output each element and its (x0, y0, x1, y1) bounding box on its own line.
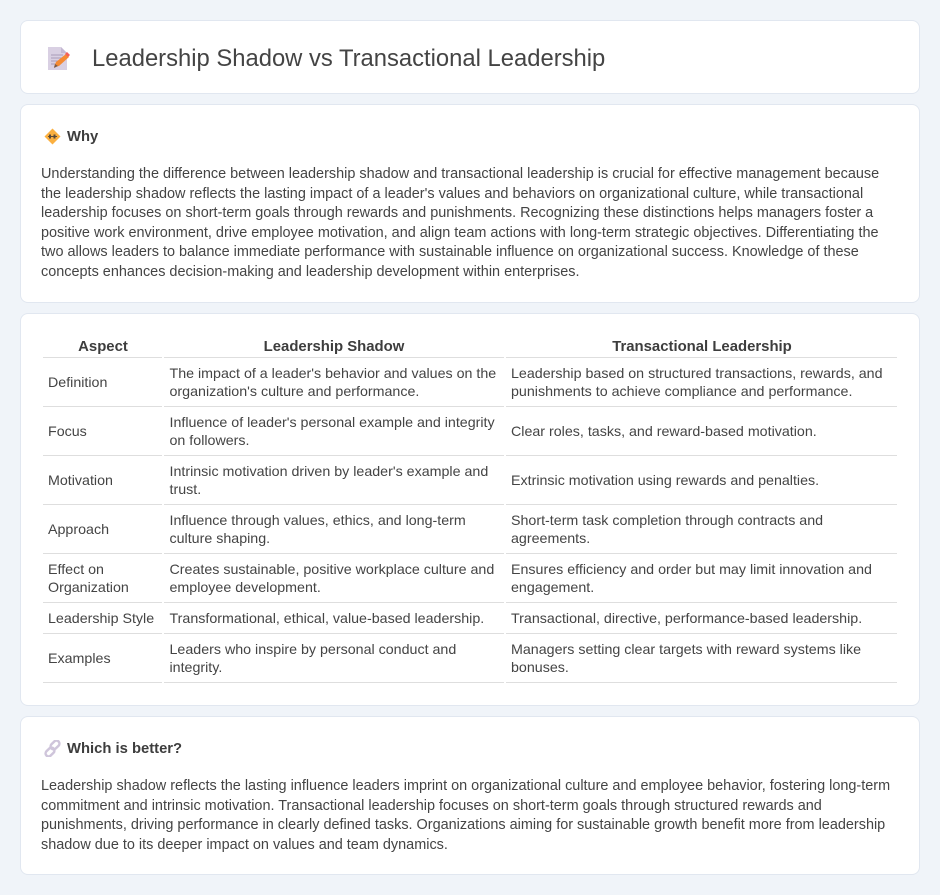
text: Effect on (48, 562, 104, 578)
text: agreements. (511, 531, 590, 547)
text: bonuses. (511, 660, 569, 676)
text: organization's culture and performance. (170, 384, 419, 400)
text: culture shaping. (170, 531, 270, 547)
heading: why: Why (67, 129, 98, 145)
text: two allows leaders to balance immediate performance with sustainable influence on organizational success. Knowledge of these (41, 244, 859, 260)
text: Approach (48, 522, 109, 538)
text: Leadership Shadow (264, 339, 404, 355)
table row: focus (48, 415, 817, 449)
text: The impact of a leader's behavior and values on the (170, 366, 496, 382)
text: positive work environment, drive employee motivation, and align team actions with long-term strategic objectives. Differentiating the (41, 225, 879, 241)
table: header row (78, 339, 792, 355)
panel: which is better (20, 716, 920, 875)
text: Leaders who inspire by personal conduct and (170, 642, 456, 658)
icon: memo with pencil (48, 47, 70, 70)
title: Leadership Shadow vs Transactional Leadership (92, 45, 605, 72)
heading: which is better: Which is better? (67, 741, 182, 757)
table row: motivation (48, 464, 819, 498)
text: Organization (48, 580, 129, 596)
text: Intrinsic motivation driven by leader's example and (170, 464, 488, 480)
table row: effect on organization (48, 562, 872, 596)
text: Leadership based on structured transactions, rewards, and (511, 366, 883, 382)
text: Influence through values, ethics, and long-term (170, 513, 466, 529)
text: integrity. (170, 660, 222, 676)
text: commitment and intrinsic motivation. Transactional leadership focuses on short-term goals through structured rewards and (41, 798, 822, 814)
icon: chain link (44, 740, 61, 757)
panel: comparison table (20, 313, 920, 706)
text block: why paragraph (41, 166, 879, 280)
text: Influence of leader's personal example and integrity (170, 415, 495, 431)
text: Clear roles, tasks, and reward-based motivation. (511, 424, 817, 440)
text: concepts enhances decision-making and leadership development within enterprises. (41, 264, 580, 280)
text: trust. (170, 482, 201, 498)
icon: road sign diamond (44, 128, 60, 144)
text: Managers setting clear targets with reward systems like (511, 642, 861, 658)
text: Understanding the difference between leadership shadow and transactional leadership is crucial for effective management because (41, 166, 879, 182)
text: employee development. (170, 580, 321, 596)
text: engagement. (511, 580, 594, 596)
text: Motivation (48, 473, 113, 489)
text: Transactional, directive, performance-based leadership. (511, 611, 862, 627)
text: Short-term task completion through contracts and (511, 513, 823, 529)
text: leadership focuses on short-term goals through rewards and punishments. Recognizing these distinctions helps managers foster a (41, 205, 873, 221)
text: Aspect (78, 339, 128, 355)
text: Leadership shadow reflects the lasting influence leaders imprint on organizational culture and employee behavior, fostering long-term (41, 778, 890, 794)
text: Leadership Style (48, 611, 154, 627)
text block: which is better paragraph (41, 778, 890, 853)
text: punishments, driving performance in clearly defined tasks. Organizations aiming for sustainable growth benefit more from leadership (41, 817, 885, 833)
text: Ensures efficiency and order but may limit innovation and (511, 562, 872, 578)
table row: approach (48, 513, 823, 547)
text: Transformational, ethical, value-based leadership. (170, 611, 484, 627)
panel: title card (20, 20, 920, 94)
text: Creates sustainable, positive workplace culture and (170, 562, 494, 578)
text: on followers. (170, 433, 250, 449)
text: Transactional Leadership (612, 339, 792, 355)
text: Examples (48, 651, 111, 667)
text: punishments to achieve compliance and performance. (511, 384, 852, 400)
table row: leadership style (48, 611, 862, 627)
text: Focus (48, 424, 87, 440)
panel: why (20, 104, 920, 303)
table row: definition (48, 366, 883, 400)
text: Definition (48, 375, 107, 391)
text: the leadership shadow reflects the lasting impact of a leader's values and behaviors on organizational culture, while transactional (41, 186, 863, 202)
text: Extrinsic motivation using rewards and penalties. (511, 473, 819, 489)
text: shadow due to its deeper impact on values and team dynamics. (41, 837, 448, 853)
table row: examples (48, 642, 861, 676)
